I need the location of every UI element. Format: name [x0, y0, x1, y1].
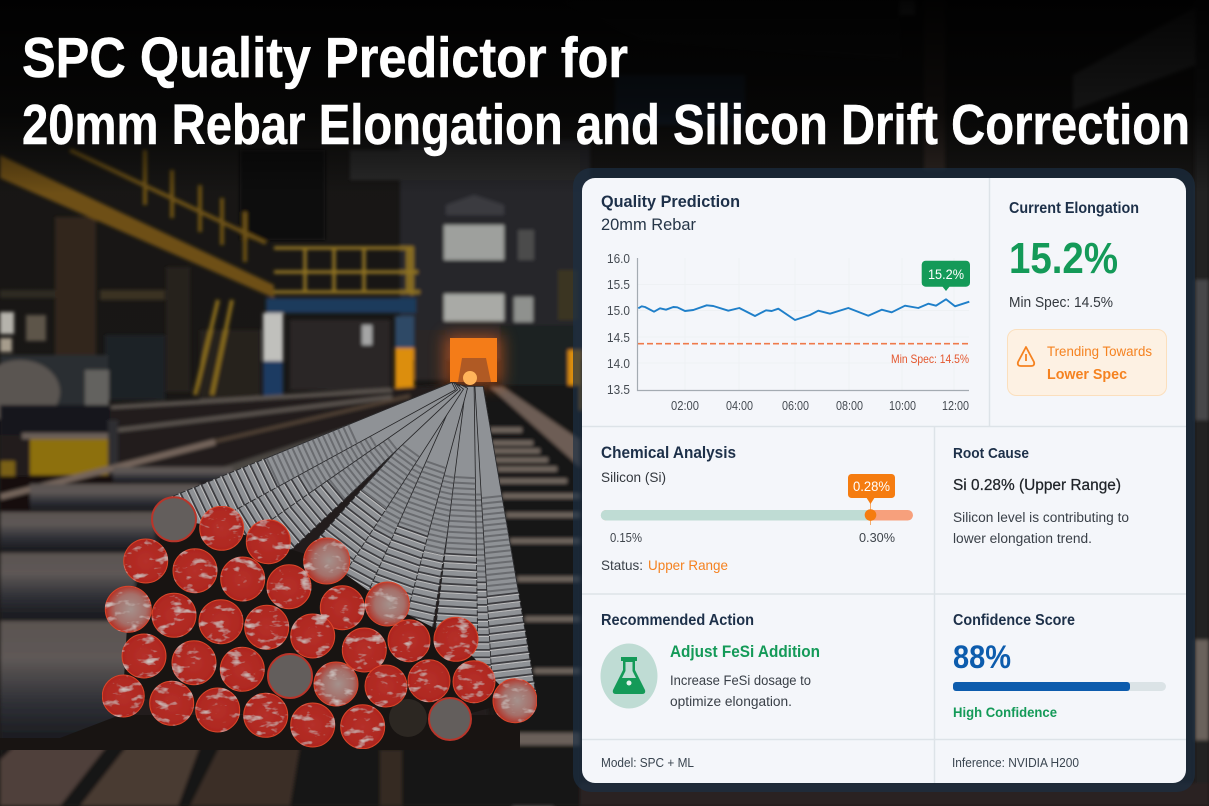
title: SPC Quality Predictor for [22, 26, 628, 90]
panel: recommended action [600, 612, 820, 709]
footer: inference: Inference: NVIDIA H200 [952, 756, 1079, 770]
planks [0, 745, 580, 806]
panel: recommended action: Increase FeSi dosage to [670, 673, 811, 688]
line chart: elongation: 06:00 [782, 398, 809, 413]
rebar cut faces [102, 506, 537, 749]
panel: chemical analysis: Chemical Analysis [601, 443, 736, 462]
callout: current value: 15.2% [928, 266, 964, 282]
panel: root cause: Si 0.28% (Upper Range) [953, 477, 1121, 494]
panel: chemical analysis: Status: [601, 557, 643, 573]
line chart: elongation: 15.5 [607, 277, 630, 292]
panel: quality prediction heading [601, 192, 740, 234]
dashboard panel [582, 178, 1186, 783]
panel: quality prediction heading: 20mm Rebar [601, 215, 696, 234]
line chart: elongation: 15.0 [607, 303, 630, 318]
line chart: elongation: Min Spec: 14.5% [891, 352, 969, 366]
panel: recommended action: optimize elongation. [670, 694, 792, 709]
panel: current elongation [1008, 200, 1166, 396]
furnace glow [445, 335, 502, 385]
panel: root cause: Root Cause [953, 445, 1029, 462]
panel: quality prediction heading: Quality Prediction [601, 192, 740, 211]
line chart: elongation: 14.0 [607, 356, 630, 371]
right track [484, 385, 580, 806]
far-left structure [55, 217, 96, 367]
panel: current elongation: Min Spec: 14.5% [1009, 295, 1113, 311]
silicon range bar: 0.28% [853, 479, 890, 494]
line chart: elongation: 13.5 [607, 382, 630, 397]
panel: chemical analysis [601, 443, 913, 573]
line chart: elongation: 16.0 [607, 251, 630, 266]
dashboard frame [573, 168, 1195, 792]
windows [444, 225, 504, 260]
line chart: elongation: 10:00 [889, 398, 916, 413]
floor [0, 385, 500, 806]
line chart: elongation: 02:00 [671, 398, 699, 413]
yellow gantry [0, 155, 274, 298]
silicon range bar: 0.30% [859, 530, 895, 545]
panel: confidence score [953, 612, 1166, 720]
line chart: elongation: 14.5 [607, 330, 630, 345]
panel: confidence score: 88% [953, 639, 1011, 675]
callout: trending warning: Lower Spec [1047, 366, 1127, 383]
line chart: elongation: 08:00 [836, 398, 863, 413]
panel: root cause: lower elongation trend. [953, 531, 1092, 546]
panel: chemical analysis: Silicon (Si) [601, 469, 666, 485]
icon: warning triangle [1018, 347, 1034, 366]
rebar shafts [165, 382, 537, 704]
rebar bundle [0, 382, 537, 750]
panel: current elongation: 15.2% [1009, 234, 1118, 283]
panel: confidence score: High Confidence [953, 704, 1057, 720]
panel: current elongation: Current Elongation [1009, 200, 1139, 217]
line chart: elongation [607, 251, 970, 413]
callout: trending warning: Trending Towards [1047, 344, 1152, 359]
title [22, 26, 1190, 157]
line chart: elongation: 04:00 [726, 398, 753, 413]
icon: flask [600, 644, 658, 708]
panel: root cause [953, 445, 1129, 546]
panel: confidence score: Confidence Score [953, 612, 1075, 629]
panel: root cause: Silicon level is contributing to [953, 510, 1129, 525]
line chart: elongation: 12:00 [942, 398, 969, 413]
silicon range bar: 0.15% [610, 530, 642, 545]
confidence bar [953, 682, 1166, 691]
callout: current value [922, 261, 970, 291]
panel: recommended action: Recommended Action [601, 612, 754, 629]
panel: chemical analysis: Upper Range [648, 557, 728, 573]
callout: trending warning [1008, 330, 1166, 396]
footer: model: Model: SPC + ML [601, 756, 694, 770]
panel: recommended action: Adjust FeSi Addition [670, 643, 820, 661]
silicon range bar [601, 474, 913, 545]
